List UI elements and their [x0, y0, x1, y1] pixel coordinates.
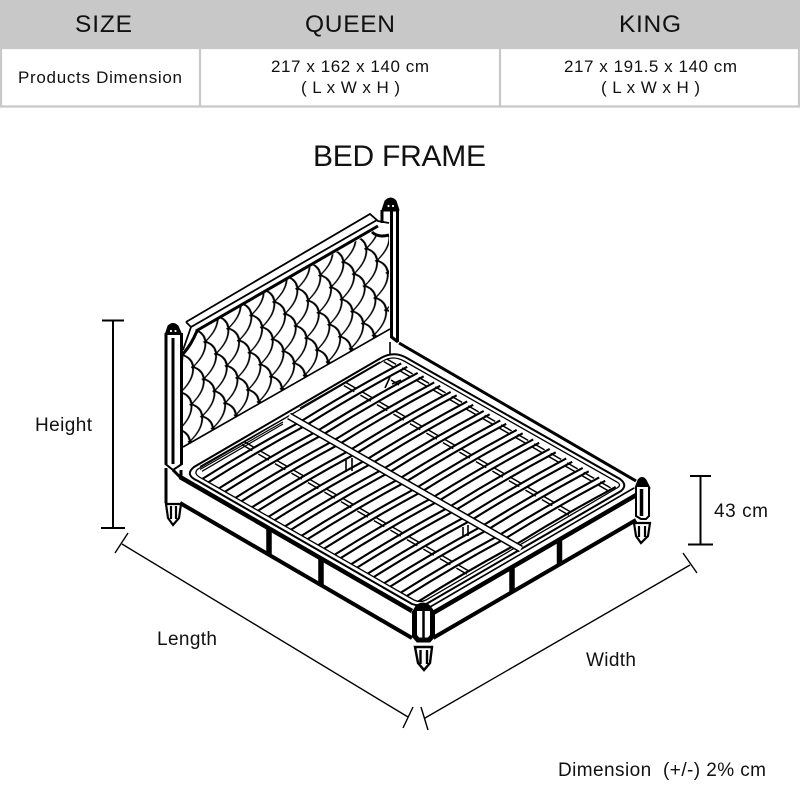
width dimension line — [421, 553, 697, 730]
title: BED FRAME — [313, 140, 486, 173]
queen dimensions: 217 x 162 x 140 cm — [271, 57, 429, 76]
front post column — [413, 611, 434, 640]
height dimension bracket — [101, 320, 125, 528]
right post column — [636, 487, 649, 518]
right short side rail — [430, 488, 638, 638]
headboard lower edge — [183, 329, 390, 447]
front post cap — [412, 603, 435, 613]
centre rail — [289, 416, 521, 549]
header: size: SIZE — [75, 11, 132, 38]
43 cm dimension bracket — [688, 476, 713, 544]
slats and webbing — [202, 358, 622, 606]
header: king: KING — [619, 11, 681, 38]
43 cm label: 43 cm — [714, 501, 768, 522]
left long side rail — [180, 477, 412, 638]
table header band — [0, 0, 800, 47]
right corner post — [634, 478, 650, 543]
headboard moulding — [183, 226, 389, 354]
back side rail — [399, 343, 636, 481]
base frame outline — [190, 354, 624, 605]
header: queen: QUEEN — [305, 11, 395, 38]
slatted base frame — [190, 354, 624, 606]
right headboard post — [382, 198, 399, 342]
height label: Height — [35, 415, 93, 436]
length label: Length — [157, 629, 217, 650]
right post foot — [634, 523, 650, 543]
king dimensions: 217 x 191.5 x 140 cm — [564, 57, 737, 76]
front post foot — [415, 647, 432, 670]
under-rail supports — [346, 377, 468, 537]
right headboard post column — [382, 210, 399, 342]
row label: Products Dimension — [18, 68, 182, 87]
left post lower section — [166, 468, 181, 503]
queen axis note: ( L x W x H ) — [301, 78, 400, 97]
left post column — [166, 334, 182, 470]
headboard top rail — [183, 214, 389, 350]
length dimension line — [115, 533, 413, 728]
bed frame drawing — [165, 198, 650, 670]
king axis note: ( L x W x H ) — [601, 78, 700, 97]
right headboard post cap — [382, 198, 399, 210]
headboard tufted scale panel — [183, 236, 389, 443]
edge strip lines — [200, 362, 380, 471]
size table — [0, 0, 800, 106]
left post foot — [166, 504, 181, 525]
table body row — [1, 48, 799, 106]
left post cap — [165, 324, 182, 335]
right post cap — [635, 478, 650, 488]
width label: Width — [586, 650, 636, 671]
base frame inner edge — [196, 358, 620, 602]
headboard — [180, 214, 392, 450]
left post — [165, 324, 182, 525]
front corner post — [412, 603, 435, 670]
tolerance note: Dimension (+/-) 2% cm — [558, 760, 766, 781]
